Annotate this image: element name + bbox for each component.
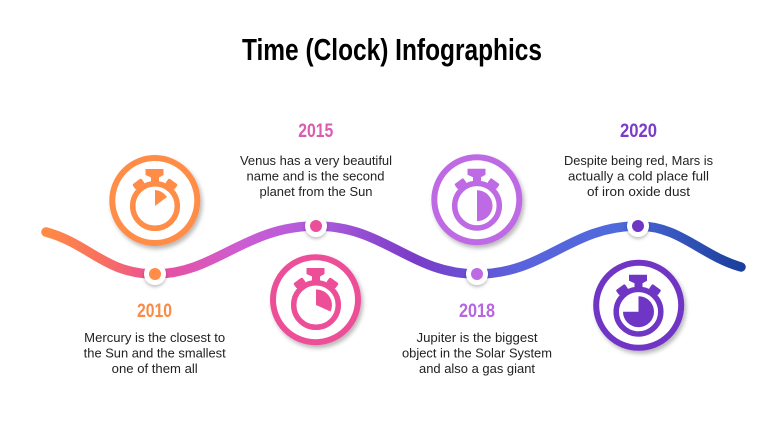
text: 2020: actually a cold place full bbox=[568, 170, 709, 184]
text: 2020 bbox=[564, 154, 713, 199]
marker: 2010 bbox=[144, 263, 166, 285]
text: 2010: the Sun and the smallest bbox=[84, 346, 226, 360]
text: 2018: and also a gas giant bbox=[419, 362, 536, 376]
panel: 2018 bbox=[402, 157, 552, 376]
text: 2015: name and is the second bbox=[246, 170, 385, 184]
text: 2018 bbox=[402, 331, 552, 376]
text: 2010: Mercury is the closest to bbox=[84, 331, 225, 345]
year: 2020: 2020 bbox=[620, 121, 657, 142]
title: Time (Clock) Infographics bbox=[242, 32, 542, 67]
icon: stopwatch orange bbox=[112, 158, 197, 243]
panel: 2010 bbox=[84, 158, 226, 376]
panel: 2020 bbox=[564, 121, 713, 348]
icon: stopwatch violet bbox=[596, 263, 681, 348]
year: 2010: 2010 bbox=[137, 301, 172, 322]
text: 2020: Despite being red, Mars is bbox=[564, 154, 713, 168]
text: 2010 bbox=[84, 331, 226, 376]
marker: 2020 bbox=[627, 215, 649, 237]
marker: 2015 bbox=[305, 215, 327, 237]
year: 2018: 2018 bbox=[459, 301, 495, 322]
text: 2015: Venus has a very beautiful bbox=[240, 154, 392, 168]
icon: stopwatch pink bbox=[273, 257, 358, 342]
text: 2018: object in the Solar System bbox=[402, 346, 552, 360]
text: 2018: Jupiter is the biggest bbox=[416, 331, 538, 345]
timeline wave bbox=[46, 226, 741, 274]
panel: 2015 bbox=[240, 121, 392, 342]
text: 2010: one of them all bbox=[112, 362, 198, 376]
text: 2015 bbox=[240, 154, 392, 199]
year: 2015: 2015 bbox=[298, 121, 334, 142]
text: 2020: of iron oxide dust bbox=[587, 185, 691, 199]
icon: stopwatch lilac bbox=[434, 157, 519, 242]
marker: 2018 bbox=[466, 263, 488, 285]
text: 2015: planet from the Sun bbox=[260, 185, 373, 199]
